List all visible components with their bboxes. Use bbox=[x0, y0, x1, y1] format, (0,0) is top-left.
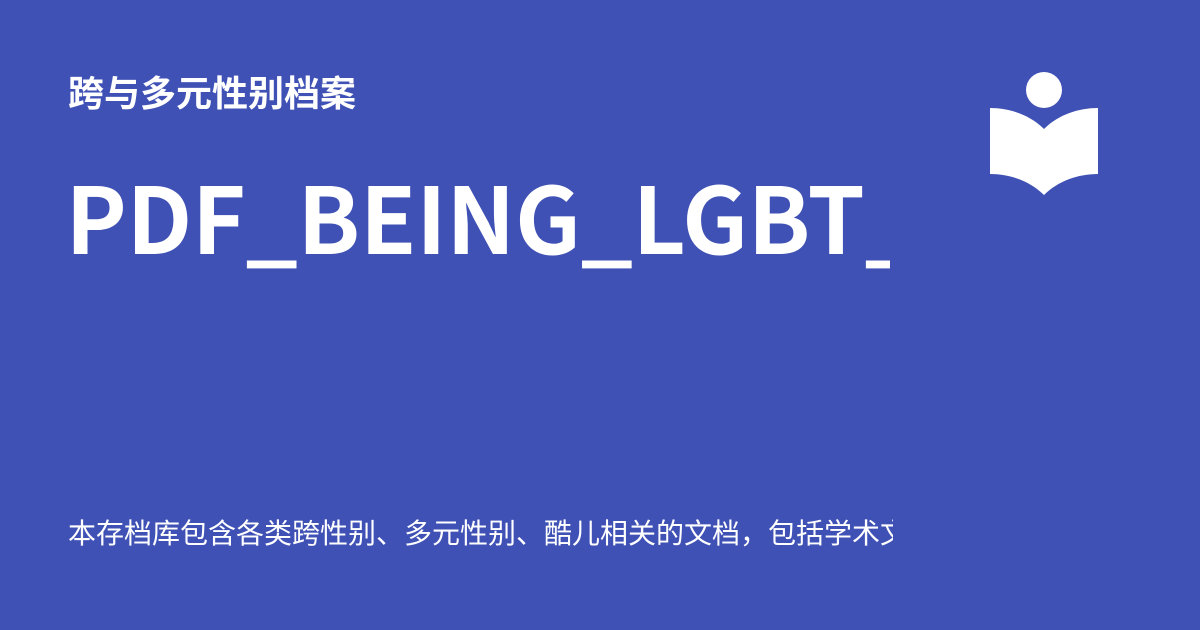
heading: archive name: 跨与多元性别档案 bbox=[68, 65, 356, 117]
icon: person reading book bbox=[990, 72, 1098, 195]
